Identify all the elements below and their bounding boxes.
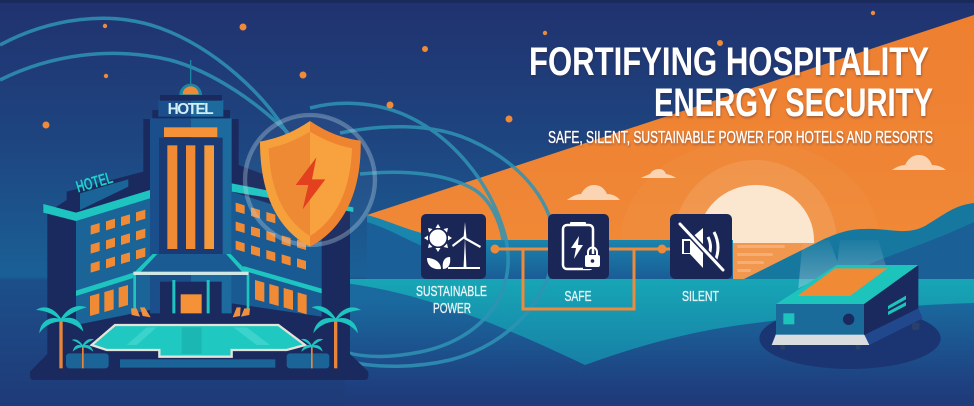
side vents — [888, 296, 906, 315]
right wing facade — [232, 192, 322, 317]
icon: safe battery lock — [548, 214, 609, 279]
tower dark panel — [159, 138, 223, 254]
decorative dots — [42, 11, 875, 128]
entrance canopy — [133, 254, 249, 315]
shield body — [260, 121, 310, 247]
title — [529, 40, 933, 125]
planters — [66, 353, 329, 368]
blue water band and left hill — [367, 215, 733, 285]
palm right large — [312, 306, 361, 368]
palm left small — [72, 339, 94, 368]
icon label: sustainable power: SUSTAINABLE — [416, 283, 487, 300]
left wing roof strip — [43, 190, 150, 221]
left wing windows — [90, 210, 145, 316]
icon: sustainable power — [421, 214, 486, 279]
sun with halo — [620, 140, 880, 346]
lightning bolt — [296, 157, 325, 209]
central tower — [150, 118, 232, 315]
rear dark masses — [47, 119, 350, 355]
battery generator unit — [759, 240, 941, 369]
front details — [783, 313, 794, 324]
icon: sun — [424, 224, 452, 252]
entrance planters — [131, 307, 250, 317]
icon label: sustainable power: POWER — [433, 300, 471, 317]
left hotel sign: HOTEL — [74, 168, 115, 197]
tower orange stripes — [167, 145, 214, 249]
pool — [92, 325, 305, 357]
icon: wind turbine — [448, 222, 481, 269]
tower crown — [152, 110, 230, 118]
left sign block — [80, 179, 128, 210]
solar panel — [797, 268, 887, 296]
connector dots — [490, 244, 666, 254]
clouds — [567, 155, 946, 200]
base plate — [772, 334, 869, 345]
icon: silent speaker — [670, 214, 732, 279]
tower hotel sign: HOTEL — [168, 101, 214, 118]
lower right wave — [546, 303, 974, 406]
teal sea band — [350, 279, 974, 371]
icon label: silent: SILENT — [682, 288, 719, 305]
energy wave lines — [0, 18, 555, 366]
shield with lightning — [245, 115, 375, 247]
icon: leaves — [427, 257, 450, 269]
shield ring — [245, 115, 375, 245]
sun reflection stripes — [737, 245, 785, 272]
orange sunset sky — [367, 15, 974, 290]
right hills — [740, 203, 974, 290]
light beams — [798, 240, 887, 288]
front face — [776, 304, 864, 335]
left wing facade — [76, 198, 150, 325]
connector lines — [495, 249, 670, 309]
top — [776, 265, 918, 304]
palm right small — [301, 339, 323, 368]
lower left wave — [345, 283, 585, 406]
right wing windows — [236, 203, 307, 314]
platform base — [30, 354, 368, 380]
palm left large — [36, 306, 87, 368]
side face — [864, 265, 918, 335]
icon: padlock — [583, 248, 602, 269]
icon label: sustainable power — [416, 283, 487, 317]
icon: battery — [563, 222, 593, 269]
ground shadow — [759, 308, 941, 369]
tower orange bar — [164, 127, 217, 137]
hotel illustration — [30, 60, 368, 380]
wheels — [780, 323, 919, 350]
base side — [864, 308, 923, 345]
icon label: safe: SAFE — [564, 288, 592, 305]
dome and antenna — [179, 60, 202, 95]
plaza — [47, 313, 350, 354]
